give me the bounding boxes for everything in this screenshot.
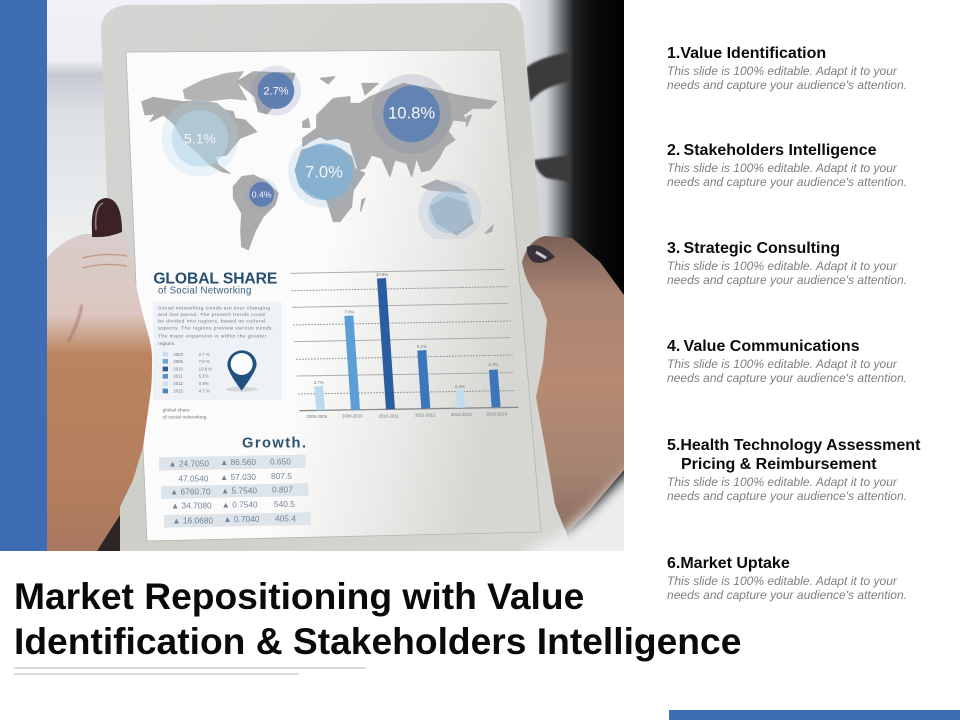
description card with legend: 10.8 %: [199, 367, 212, 372]
item 5: needs and capture your audience's attention.: [667, 489, 907, 503]
world map: [142, 66, 497, 250]
item 6: 6.Market Uptake: [667, 555, 790, 572]
title: Market Repositioning with Value: [14, 574, 584, 616]
icon: location pin: [226, 350, 258, 392]
item 6: This slide is 100% editable. Adapt it to your: [667, 574, 897, 588]
description card with legend: of social networking.: [163, 414, 208, 420]
item 2: 2. Stakeholders Intelligence: [667, 142, 876, 159]
photo: hands holding tablet with infographic: [47, 0, 624, 551]
description card with legend: 2005: [173, 359, 184, 364]
growth table: ▲ 16.0680: [172, 515, 213, 525]
item 1: This slide is 100% editable. Adapt it to your: [667, 64, 897, 78]
growth table: ▲ 34.7080: [171, 501, 212, 511]
heading: global share: [153, 270, 277, 296]
growth table: ▲ 6760.70: [170, 486, 211, 496]
heading: global share: of Social Networking: [158, 285, 251, 296]
growth table: 47.0540: [178, 473, 209, 483]
icon: thumb nail: [92, 198, 122, 237]
region circles: 5.1%: [184, 130, 216, 146]
title underline rules: [14, 667, 366, 675]
item 6: [667, 555, 907, 602]
growth table: Growth.: [242, 435, 306, 451]
bar chart: 2011-2012: [415, 413, 436, 418]
growth table: 0.807: [272, 485, 293, 495]
item 4: needs and capture your audience's attention.: [667, 371, 907, 385]
growth table: ▲ 57.030: [220, 472, 256, 482]
growth table: 807.5: [271, 471, 292, 481]
item 4: 4. Value Communications: [667, 338, 860, 355]
description card with legend: 0.4%: [199, 381, 209, 386]
bar chart: 2.7%: [314, 380, 324, 385]
title: [14, 574, 741, 662]
description card with legend: 2012: [173, 381, 184, 386]
item 5: 5.Health Technology Assessment: [667, 437, 920, 454]
growth table: ▲ 24.7050: [168, 459, 209, 469]
description card with legend: 4.7 %: [199, 388, 210, 393]
white sleeve at bottom right: [525, 460, 680, 590]
item 6: needs and capture your audience's attention.: [667, 588, 907, 602]
description card with legend: 7.0 %: [199, 359, 210, 364]
description card with legend: The major expansion is within the greater: [158, 333, 267, 339]
item 5: Pricing & Reimbursement: [681, 456, 877, 473]
item 1: 1.Value Identification: [667, 45, 826, 62]
description card with legend: Social networking trends are ever changing: [158, 306, 270, 312]
description card with legend: be divided into regions, based on cultural: [158, 319, 265, 325]
description card with legend: regions.: [158, 341, 175, 347]
description card with legend: global share: [163, 408, 190, 414]
bar chart: 10.8%: [376, 272, 388, 277]
bar chart: 4.7%: [488, 362, 498, 367]
heading: global share: GLOBAL SHARE: [153, 270, 277, 287]
growth table: 0.650: [270, 456, 291, 466]
right hand with finger: [522, 236, 624, 530]
description card with legend: 2.7 %: [199, 352, 210, 357]
list: six value items: [667, 45, 920, 602]
item 3: [667, 240, 907, 287]
bar chart: 5.1%: [417, 344, 427, 349]
description card with legend: 5.1%: [199, 374, 209, 379]
title: Identification & Stakeholders Intelligence: [14, 620, 741, 662]
growth table: [159, 435, 311, 528]
item 2: [667, 142, 907, 189]
description card with legend: 2011: [173, 374, 183, 379]
description card with legend: 2015: [173, 388, 184, 393]
bar chart: 7.0%: [344, 309, 354, 314]
region circles: [162, 66, 482, 243]
item 2: needs and capture your audience's attention.: [667, 175, 907, 189]
growth table: 540.5: [274, 499, 295, 509]
item 3: This slide is 100% editable. Adapt it to your: [667, 259, 897, 273]
bar chart: 2012-2013: [451, 412, 472, 417]
tablet screen: [126, 50, 541, 541]
item 2: This slide is 100% editable. Adapt it to your: [667, 161, 897, 175]
growth table: ▲ 86.560: [220, 457, 256, 467]
region circles: 10.8%: [388, 104, 435, 123]
item 5: [667, 437, 920, 503]
growth table: ▲ 5.7540: [221, 485, 257, 495]
description card with legend: aspects. The regions preview various trends.: [158, 325, 273, 331]
item 1: [667, 45, 907, 92]
global share panel and chart: [153, 269, 518, 528]
bar chart: 2013-2014: [486, 411, 508, 416]
region circles: 7.0%: [305, 162, 343, 181]
description card with legend: [153, 302, 282, 420]
item 4: This slide is 100% editable. Adapt it to your: [667, 357, 897, 371]
bar chart: 2008-2009: [306, 414, 328, 419]
description card with legend: and fast paced. The present trends could: [158, 312, 265, 318]
bottom right blue bar: [669, 710, 960, 720]
region circles: 2.7%: [263, 86, 289, 98]
left blue bar: [0, 0, 47, 551]
growth table: ▲ 0.7040: [223, 514, 260, 524]
tablet body: [101, 3, 570, 551]
description card with legend: 2010: [173, 367, 184, 372]
bar chart: [290, 269, 518, 419]
item 3: needs and capture your audience's attention.: [667, 273, 907, 287]
growth table: ▲ 0.7540: [222, 500, 258, 510]
bar chart: 2010-2011: [378, 413, 399, 418]
mug handle in background: [526, 52, 570, 182]
bar chart: 2009-2010: [342, 413, 363, 418]
item 4: [667, 338, 907, 385]
region circles: 0.4%: [252, 190, 272, 200]
left hand with thumb: [47, 198, 152, 551]
bar chart: 0.4%: [455, 384, 465, 389]
item 1: needs and capture your audience's attention.: [667, 78, 907, 92]
growth table: 405.4: [275, 514, 296, 524]
icon: finger nail: [527, 245, 555, 263]
item 5: This slide is 100% editable. Adapt it to your: [667, 475, 897, 489]
item 3: 3. Strategic Consulting: [667, 240, 840, 257]
description card with legend: 2003: [173, 352, 184, 357]
